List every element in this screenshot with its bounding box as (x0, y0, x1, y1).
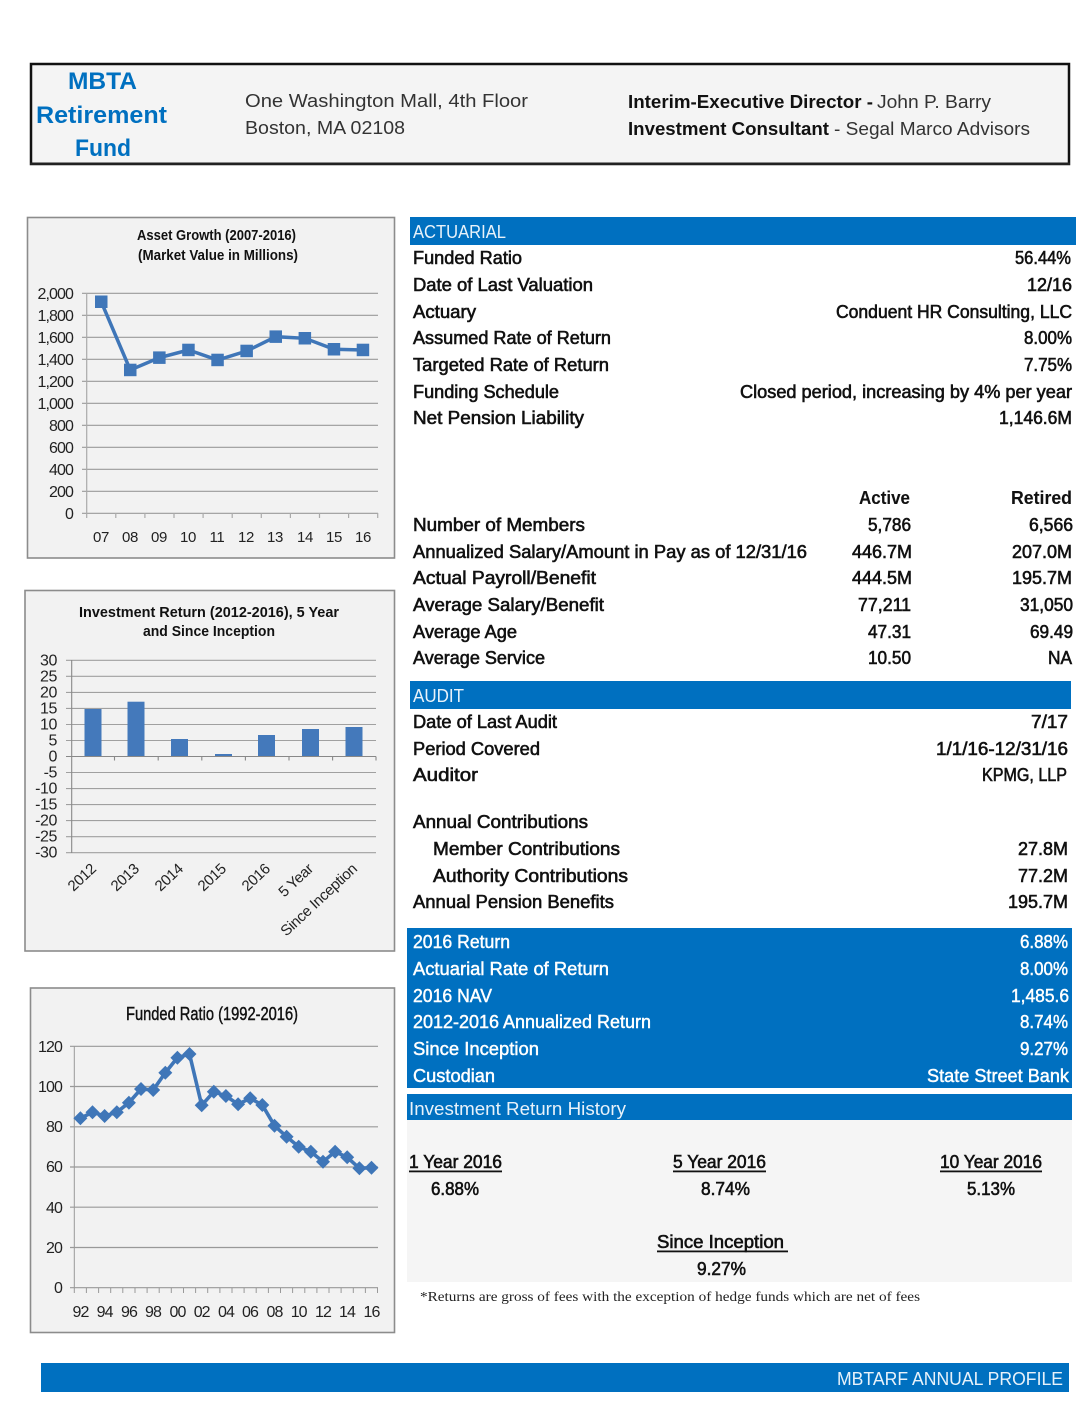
retired values: 31,050 (1020, 595, 1073, 615)
summary labels: 2016 Return (413, 932, 510, 952)
actuarial labels: Funding Schedule (413, 382, 559, 402)
chart title: Investment Return (2012-2016), 5 Year (79, 604, 339, 621)
director and consultant text: John P. Barry (877, 92, 991, 112)
summary labels: Actuarial Rate of Return (413, 959, 609, 979)
x axis labels: 06 (242, 1304, 259, 1321)
x axis labels: 12 (315, 1304, 332, 1321)
retired values: NA (1048, 648, 1072, 668)
y axis labels: 20 (40, 684, 57, 702)
audit labels: Member Contributions (433, 839, 620, 859)
y axis labels: -10 (35, 780, 57, 798)
y axis labels (38, 1039, 63, 1297)
y axis labels: 1,400 (37, 352, 74, 369)
x axis labels: 15 (326, 529, 342, 546)
chart title: (Market Value in Millions) (138, 247, 298, 264)
active values: 47.31 (868, 622, 911, 642)
summary values: State Street Bank (927, 1066, 1070, 1086)
one year return: 6.88% (431, 1179, 479, 1199)
actuarial values: 7.75% (1024, 355, 1072, 375)
row labels (413, 515, 807, 668)
y axis labels (35, 652, 58, 862)
actuarial values: 1,146.6M (999, 408, 1072, 428)
row labels: Average Age (413, 622, 517, 642)
retired values (1012, 515, 1073, 668)
heading: audit: AUDIT (413, 686, 464, 706)
chart title: Funded Ratio (1992-2016) (126, 1004, 298, 1024)
x axis labels: 07 (93, 529, 109, 546)
retired values: 195.7M (1012, 568, 1072, 588)
x axis labels: 10 (291, 1304, 308, 1321)
address text: One Washington Mall, 4th Floor (245, 91, 528, 111)
x axis labels: 14 (297, 529, 313, 546)
audit labels: Annual Contributions (413, 812, 588, 832)
summary values: 8.74% (1020, 1012, 1068, 1032)
x axis labels: 2016 (239, 860, 274, 895)
y axis labels: 20 (46, 1240, 63, 1257)
y axis labels: 120 (38, 1039, 63, 1056)
actuarial labels: Assumed Rate of Return (413, 328, 611, 348)
x axis labels: 94 (97, 1304, 114, 1321)
y axis labels: 400 (49, 462, 74, 479)
summary labels: 2016 NAV (413, 986, 492, 1006)
five year return: 8.74% (701, 1179, 750, 1199)
panel: investment return history (407, 1094, 1072, 1282)
active values: 10.50 (868, 648, 911, 668)
y axis labels: 0 (48, 748, 58, 766)
y axis labels: 10 (40, 716, 57, 734)
bars (84, 702, 362, 756)
audit values: KPMG, LLP (982, 765, 1067, 785)
row labels: Average Salary/Benefit (413, 595, 604, 615)
panel: asset growth line chart (28, 218, 394, 558)
x axis labels: 14 (339, 1304, 356, 1321)
summary labels: 2012-2016 Annualized Return (413, 1012, 651, 1032)
x axis labels: 16 (355, 529, 371, 546)
title: fund name: MBTA (68, 68, 137, 95)
title: fund name: Retirement (36, 102, 167, 129)
y axis labels: -15 (35, 796, 57, 814)
x axis labels: 11 (210, 529, 224, 546)
since inception return: Since Inception (657, 1232, 784, 1252)
y axis labels: 60 (46, 1159, 63, 1176)
x axis labels: 02 (194, 1304, 211, 1321)
actuarial labels: Net Pension Liability (413, 408, 584, 428)
actuarial values: 56.44% (1015, 248, 1071, 268)
x axis labels: 2015 (195, 860, 230, 895)
panel: investment return bar chart (25, 590, 394, 951)
ten year return (940, 1152, 1042, 1199)
panel: actuarial (410, 217, 1076, 428)
actuarial labels: Date of Last Valuation (413, 275, 593, 295)
x axis labels (65, 860, 361, 940)
since inception return: 9.27% (697, 1259, 746, 1279)
y axis labels: 5 (48, 732, 58, 750)
actuarial values (740, 248, 1072, 428)
row labels: Average Service (413, 648, 545, 668)
page header panel (30, 64, 1070, 165)
x axis labels: 10 (180, 529, 196, 546)
x axis labels: 16 (364, 1304, 380, 1321)
y axis labels: -20 (35, 812, 57, 830)
x axis labels: 2014 (152, 860, 187, 895)
audit values (936, 712, 1068, 912)
active values: 5,786 (868, 515, 911, 535)
audit labels: Annual Pension Benefits (413, 892, 614, 912)
y axis labels: -25 (35, 828, 57, 846)
chart title: Asset Growth (2007-2016) (137, 227, 296, 244)
x axis labels: 13 (267, 529, 283, 546)
summary labels: Custodian (413, 1066, 495, 1086)
y axis labels: 15 (40, 700, 57, 718)
since inception return (657, 1232, 788, 1279)
director and consultant text (628, 92, 1030, 139)
y axis labels: 800 (49, 418, 74, 435)
title: fund name (36, 68, 167, 162)
y axis labels: 1,200 (37, 374, 74, 391)
heading: investment return history: Investment Return History (409, 1099, 626, 1119)
five year return: 5 Year 2016 (673, 1152, 766, 1172)
address text: Boston, MA 02108 (245, 118, 405, 138)
x axis labels: 12 (238, 529, 254, 546)
five year return (673, 1152, 766, 1199)
audit values: 1/1/16-12/31/16 (936, 739, 1068, 759)
x axis labels: 2012 (65, 860, 100, 895)
y axis labels: 2,000 (37, 286, 74, 303)
active values: 77,211 (858, 595, 911, 615)
audit labels: Date of Last Audit (413, 712, 557, 732)
y axis labels: 30 (40, 652, 57, 670)
column headers (859, 488, 1072, 508)
y axis labels: 80 (46, 1119, 63, 1136)
column headers: Retired (1011, 488, 1072, 508)
row labels: Number of Members (413, 515, 585, 535)
retired values: 6,566 (1029, 515, 1073, 535)
heading: actuarial (410, 217, 1076, 245)
heading: audit (410, 681, 1071, 709)
summary values: 8.00% (1020, 959, 1068, 979)
x axis labels (72, 1304, 380, 1321)
y axis labels: 200 (49, 484, 74, 501)
retired values: 207.0M (1012, 542, 1072, 562)
summary values: 6.88% (1020, 932, 1068, 952)
y axis labels: 100 (38, 1079, 63, 1096)
one year return: 1 Year 2016 (409, 1152, 502, 1172)
row labels: Actual Payroll/Benefit (413, 568, 596, 588)
title: fund name: Fund (75, 135, 131, 162)
panel: funded ratio line chart (30, 988, 394, 1332)
data line with diamond markers (73, 1047, 379, 1175)
actuarial labels: Targeted Rate of Return (413, 355, 609, 375)
chart title (79, 604, 339, 640)
active values (852, 515, 912, 668)
actuarial values: Conduent HR Consulting, LLC (836, 302, 1072, 322)
y axis labels: -5 (44, 764, 57, 782)
y axis labels: 0 (65, 506, 74, 523)
x axis labels: 92 (72, 1304, 89, 1321)
audit labels (413, 712, 628, 912)
active values: 444.5M (852, 568, 912, 588)
actuarial values: Closed period, increasing by 4% per year (740, 382, 1072, 402)
director and consultant text: - Segal Marco Advisors (834, 119, 1030, 139)
panel: return summary (407, 928, 1072, 1088)
ten year return: 10 Year 2016 (940, 1152, 1042, 1172)
audit labels: Period Covered (413, 739, 540, 759)
x axis labels: 08 (266, 1304, 283, 1321)
row labels: Annualized Salary/Amount in Pay as of 12/31/16 (413, 542, 807, 562)
column headers: Active (859, 488, 910, 508)
audit labels: Authority Contributions (433, 866, 628, 886)
panel: member statistics table (413, 488, 1073, 668)
y axis labels (37, 286, 74, 523)
data line with square markers (95, 296, 369, 376)
summary values: 1,485.6 (1011, 986, 1069, 1006)
summary labels (413, 932, 651, 1086)
y axis labels: 40 (46, 1200, 63, 1217)
audit values: 7/17 (1031, 712, 1068, 732)
heading: investment return history (407, 1094, 1072, 1120)
footer bar: MBTARF ANNUAL PROFILE (837, 1369, 1063, 1389)
actuarial labels: Funded Ratio (413, 248, 522, 268)
footer bar (41, 1363, 1069, 1392)
x axis labels: Since Inception (277, 860, 361, 940)
y axis labels: 1,600 (37, 330, 74, 347)
y axis labels: 0 (54, 1280, 63, 1297)
one year return (409, 1152, 502, 1199)
chart title (137, 227, 298, 264)
audit values: 195.7M (1008, 892, 1068, 912)
y axis labels: 1,000 (37, 396, 74, 413)
actuarial labels: Actuary (413, 302, 476, 322)
x axis labels (93, 529, 371, 546)
retired values: 69.49 (1030, 622, 1073, 642)
ten year return: 5.13% (967, 1179, 1015, 1199)
actuarial values: 12/16 (1027, 275, 1072, 295)
footnote: *Returns are gross of fees with the exception of hedge funds which are net of fees (420, 1290, 920, 1305)
y axis labels: 25 (40, 668, 57, 686)
audit values: 77.2M (1018, 866, 1068, 886)
x axis labels: 08 (122, 529, 138, 546)
y axis labels: -30 (35, 844, 57, 862)
x axis labels: 00 (170, 1304, 186, 1321)
actuarial labels (413, 248, 611, 428)
panel: audit (410, 681, 1071, 912)
director and consultant text: Investment Consultant (628, 119, 829, 139)
y axis labels: 1,800 (37, 308, 74, 325)
x axis labels: 98 (145, 1304, 162, 1321)
heading: actuarial: ACTUARIAL (413, 222, 506, 242)
address text (245, 91, 528, 138)
active values: 446.7M (852, 542, 912, 562)
audit labels: Auditor (413, 765, 478, 785)
actuarial values: 8.00% (1024, 328, 1072, 348)
summary values (927, 932, 1070, 1086)
summary values: 9.27% (1020, 1039, 1068, 1059)
chart title: and Since Inception (143, 623, 275, 640)
x axis labels: 04 (218, 1304, 235, 1321)
audit values: 27.8M (1018, 839, 1068, 859)
y axis labels: 600 (49, 440, 74, 457)
x axis labels: 09 (151, 529, 167, 546)
director and consultant text: Interim-Executive Director - (628, 92, 873, 112)
summary labels: Since Inception (413, 1039, 539, 1059)
x axis labels: 96 (121, 1304, 138, 1321)
x axis labels: 5 Year (275, 860, 317, 901)
x axis labels: 2013 (108, 860, 143, 895)
